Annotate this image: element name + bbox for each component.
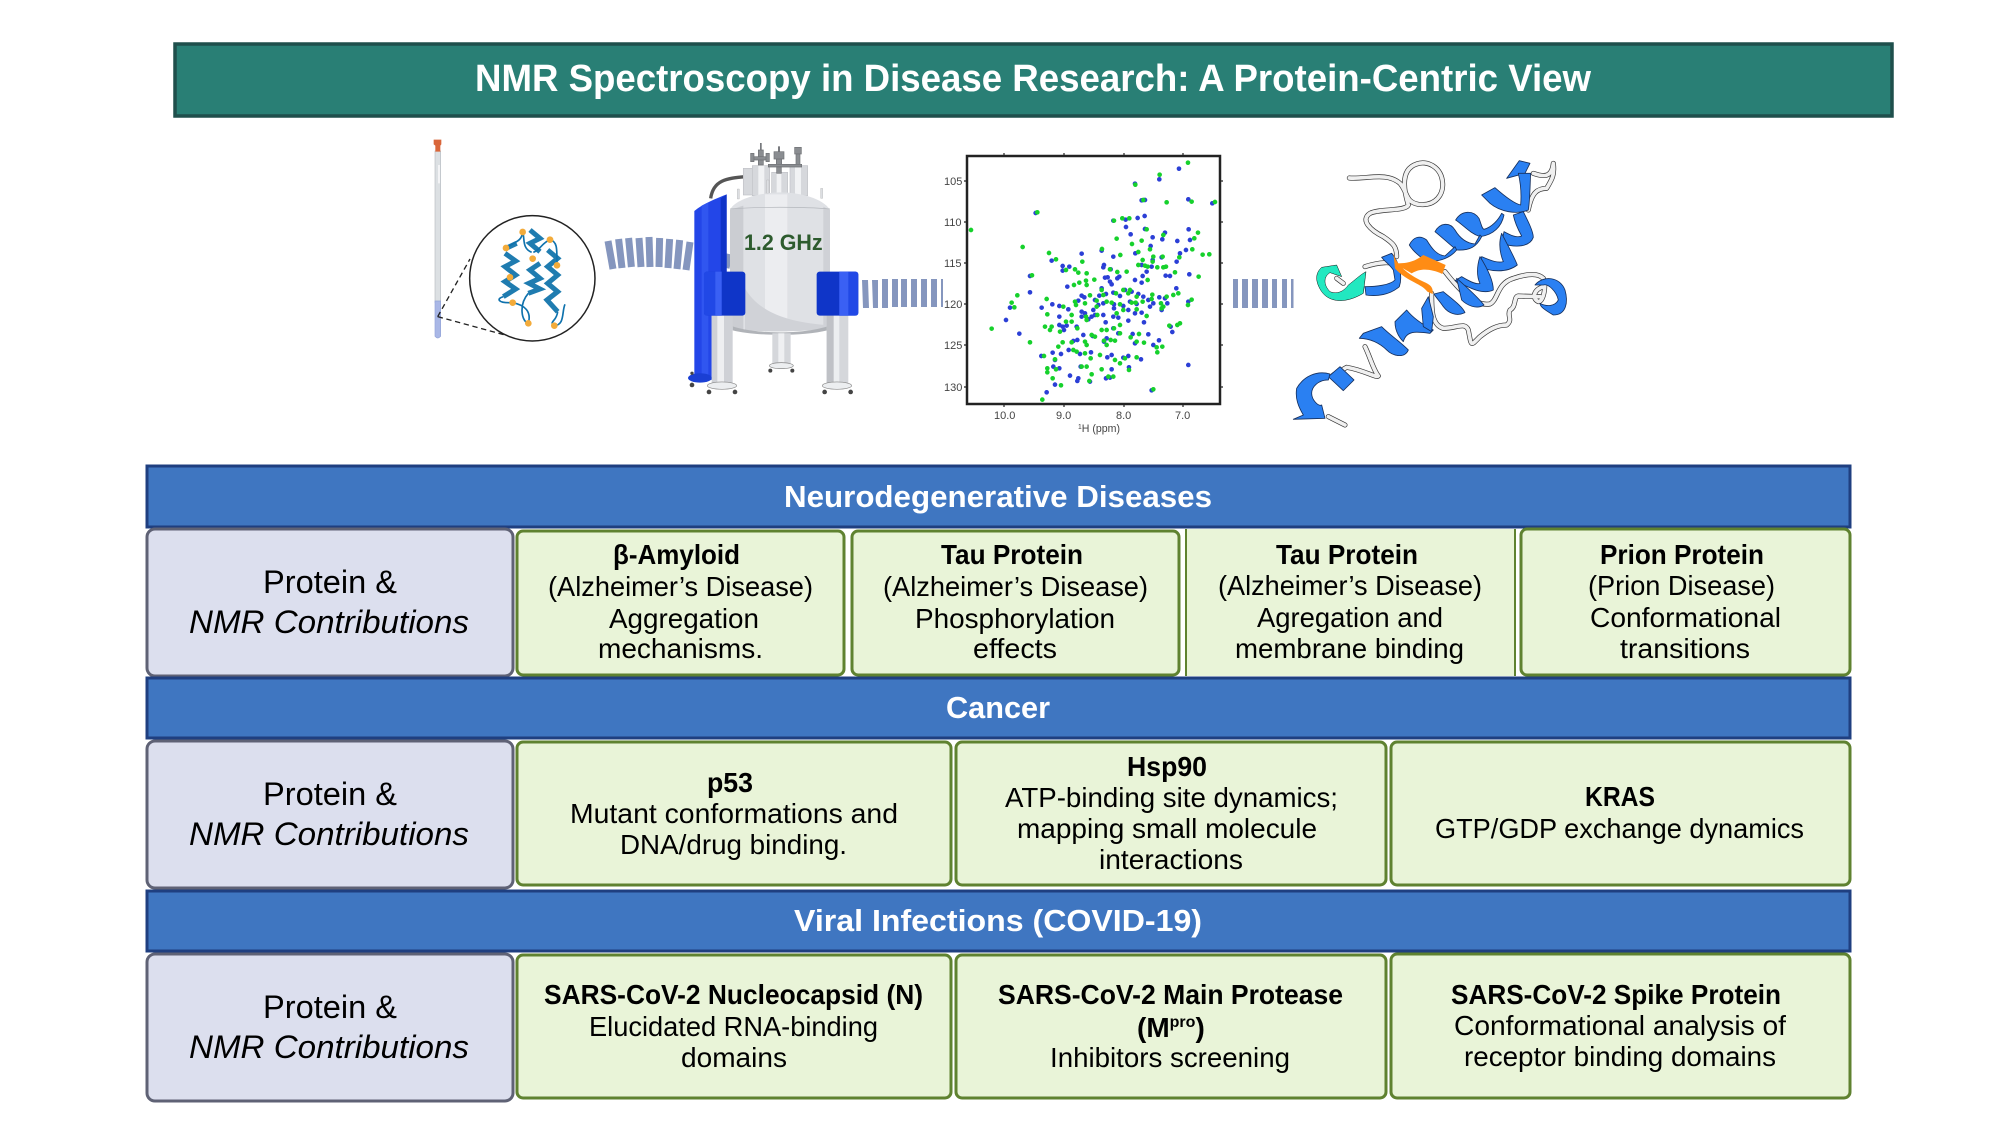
header: Cancer: Cancer — [946, 690, 1050, 725]
panel: beta-amyloid: Aggregation — [609, 603, 759, 634]
spectrum y axis labels — [944, 176, 962, 394]
header: Cancer — [147, 678, 1850, 738]
panel: KRAS — [1391, 742, 1850, 885]
panel: tau phosphorylation: effects — [973, 633, 1057, 664]
panel: row label neurodegenerative: Protein & — [263, 564, 397, 600]
header: Neurodegenerative Diseases — [147, 466, 1850, 527]
panel: Hsp90: Hsp90 — [1127, 751, 1207, 782]
panel: SARS-CoV-2 main protease: ) — [1195, 1012, 1205, 1043]
spectrum x axis labels: 9.0 — [1056, 410, 1071, 422]
panel: tau phosphorylation — [852, 531, 1179, 675]
panel: row label viral: Protein & — [263, 989, 397, 1025]
cyan beta strand — [1317, 265, 1366, 301]
header: Viral Infections: Viral Infections (COVID-19) — [794, 903, 1202, 938]
panel: tau aggregation: (Alzheimer’s Disease) — [1218, 570, 1482, 601]
icon: NMR tube with protein sample — [434, 140, 595, 341]
panel: Hsp90: mapping small molecule — [1017, 813, 1317, 844]
chart: 2D HSQC NMR spectrum — [944, 153, 1223, 435]
panel: SARS-CoV-2 nucleocapsid — [517, 955, 951, 1098]
spectrum y axis labels: 130 — [944, 382, 962, 394]
panel: p53: DNA/drug binding. — [620, 829, 847, 860]
panel: SARS-CoV-2 spike protein: receptor binding domains — [1464, 1041, 1776, 1072]
panel: Hsp90: interactions — [1099, 844, 1243, 875]
panel: SARS-CoV-2 nucleocapsid: SARS-CoV-2 Nucleocapsid (N) — [544, 979, 923, 1010]
icon: protein 3D ribbon structure — [1293, 161, 1566, 425]
panel: Hsp90 — [956, 742, 1386, 885]
white backbone loops fill — [1328, 163, 1554, 425]
panel: KRAS: KRAS — [1585, 781, 1655, 812]
panel: tau aggregation: membrane binding — [1235, 633, 1464, 664]
panel: SARS-CoV-2 spike protein — [1391, 954, 1850, 1098]
green spectrum peaks — [971, 163, 1215, 400]
panel: beta-amyloid: mechanisms. — [598, 633, 763, 664]
panel: prion protein: transitions — [1620, 633, 1750, 664]
arrow: signal bars from sample to magnet — [608, 237, 729, 270]
panel: SARS-CoV-2 nucleocapsid: Elucidated RNA-binding — [589, 1011, 878, 1042]
panel: p53 — [517, 742, 951, 885]
spectrum x axis labels: 8.0 — [1116, 410, 1131, 422]
title banner — [175, 44, 1892, 116]
panel: SARS-CoV-2 main protease — [956, 955, 1386, 1098]
panel: tau aggregation: Agregation and — [1257, 602, 1443, 633]
header: Viral Infections — [147, 891, 1850, 951]
panel: p53: Mutant conformations and — [570, 798, 898, 829]
panel: tau phosphorylation: Phosphorylation — [915, 603, 1115, 634]
spectrum y axis labels: 120 — [944, 299, 962, 311]
spectrum y axis labels: 125 — [944, 340, 962, 352]
panel: SARS-CoV-2 main protease: pro — [1170, 1014, 1196, 1031]
panel: row label cancer: NMR Contributions — [189, 816, 469, 852]
white backbone loops outline — [1328, 163, 1554, 425]
arrow: signal bars from magnet to spectrum — [862, 279, 943, 308]
arrow: signal bars from spectrum to structure — [1233, 279, 1294, 308]
panel: SARS-CoV-2 main protease: SARS-CoV-2 Main Protease — [998, 979, 1343, 1010]
panel: SARS-CoV-2 spike protein: SARS-CoV-2 Spike Protein — [1451, 979, 1781, 1010]
title banner: NMR Spectroscopy in Disease Research: A Protein-Centric View — [475, 58, 1591, 100]
panel: beta-amyloid: β-Amyloid — [613, 539, 740, 570]
panel: SARS-CoV-2 nucleocapsid: domains — [681, 1042, 787, 1073]
panel: beta-amyloid: (Alzheimer’s Disease) — [548, 571, 813, 602]
spectrum x axis labels: 1 — [1078, 424, 1082, 431]
panel: prion protein: Prion Protein — [1600, 539, 1764, 570]
panel: tau aggregation: Tau Protein — [1276, 539, 1418, 570]
blue spectrum peaks — [1006, 169, 1212, 392]
panel: row label neurodegenerative — [147, 529, 513, 676]
panel: row label viral: NMR Contributions — [189, 1029, 469, 1065]
panel: prion protein: (Prion Disease) — [1588, 570, 1775, 601]
panel: SARS-CoV-2 main protease: Inhibitors screening — [1050, 1042, 1290, 1073]
panel: tau aggregation — [1186, 529, 1515, 676]
spectrum y axis labels: 105 — [944, 176, 962, 188]
spectrum y axis labels: 115 — [944, 258, 962, 270]
spectrum x axis labels — [994, 410, 1190, 435]
magnet field label: 1.2 GHz — [744, 230, 823, 255]
panel: row label viral — [147, 954, 513, 1101]
icon: 1.2 GHz NMR magnet — [688, 143, 858, 394]
panel: beta-amyloid — [517, 531, 844, 675]
panel: row label cancer: Protein & — [263, 776, 397, 812]
orange beta strand — [1393, 253, 1446, 294]
panel: SARS-CoV-2 main protease: (M — [1137, 1012, 1170, 1043]
panel: prion protein: Conformational — [1590, 602, 1781, 633]
panel: KRAS: GTP/GDP exchange dynamics — [1435, 813, 1804, 844]
spectrum y axis labels: 110 — [944, 217, 962, 229]
header: Neurodegenerative Diseases: Neurodegenerative Diseases — [784, 479, 1212, 514]
spectrum x axis labels: 10.0 — [994, 410, 1015, 422]
panel: tau phosphorylation: (Alzheimer’s Disease) — [883, 571, 1148, 602]
spectrum x axis labels: H (ppm) — [1082, 423, 1120, 435]
panel: row label neurodegenerative: NMR Contributions — [189, 604, 469, 640]
panel: SARS-CoV-2 spike protein: Conformational analysis of — [1454, 1010, 1786, 1041]
panel: tau phosphorylation: Tau Protein — [941, 539, 1083, 570]
blue alpha helices — [1293, 161, 1566, 419]
panel: prion protein — [1521, 529, 1850, 675]
panel: Hsp90: ATP-binding site dynamics; — [1005, 782, 1338, 813]
spectrum x axis labels: 7.0 — [1175, 410, 1190, 422]
panel: p53: p53 — [707, 767, 753, 798]
panel: row label cancer — [147, 741, 513, 888]
